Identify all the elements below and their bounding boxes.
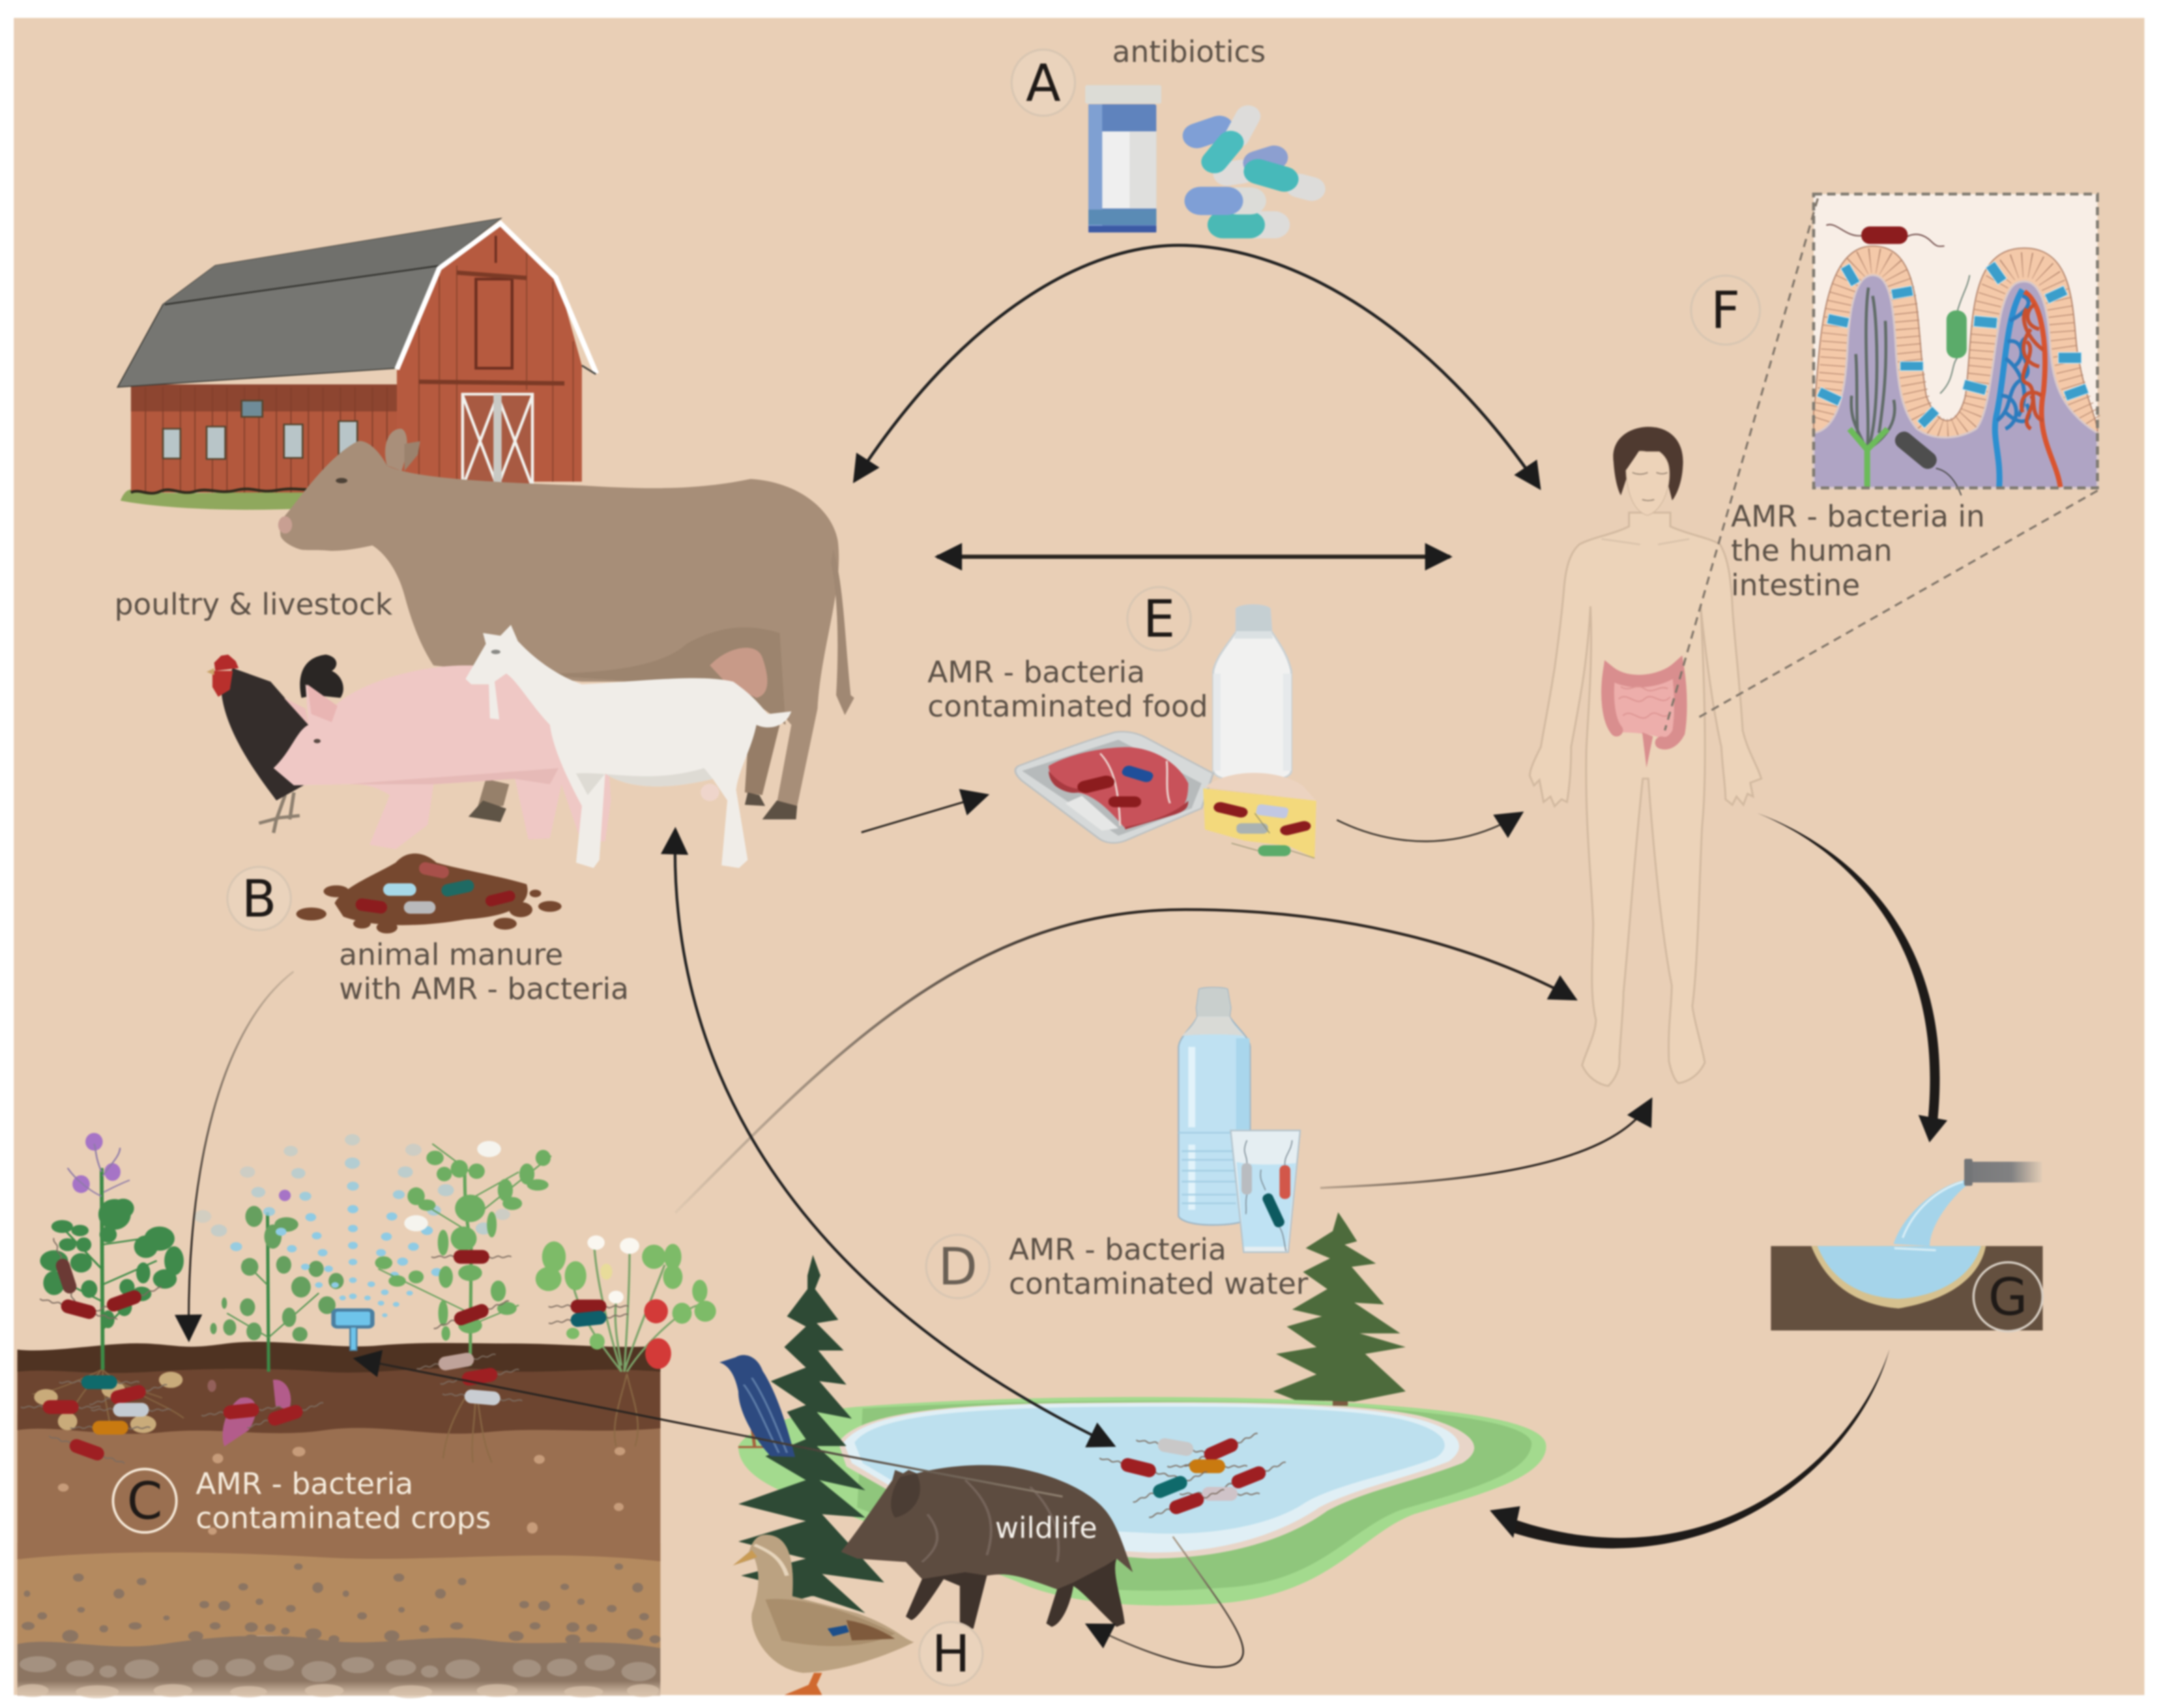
crop bacteria xyxy=(21,1236,629,1470)
head xyxy=(1602,427,1689,544)
plant 3 xyxy=(375,1141,551,1366)
water stream xyxy=(1894,1180,1967,1246)
icon: bottle of water xyxy=(1178,988,1250,1225)
text: contaminated food: contaminated food xyxy=(927,689,1208,724)
barn windows xyxy=(163,401,357,459)
label D: D xyxy=(938,1238,978,1297)
text: contaminated water: AMR - bacteria xyxy=(1009,1232,1226,1267)
inset background xyxy=(1814,194,2097,488)
pond water xyxy=(854,1406,1445,1533)
plant 2 xyxy=(210,1190,343,1372)
text: contaminated crops: AMR - bacteria xyxy=(196,1466,413,1501)
panel B: barn xyxy=(117,218,596,510)
panel C: soil layers xyxy=(16,1342,660,1698)
label F: F xyxy=(1711,281,1740,340)
inset frame xyxy=(1814,194,2097,488)
label E: E xyxy=(1143,590,1175,649)
arrow: animals to food xyxy=(862,795,987,832)
grass xyxy=(121,489,314,510)
label A: A xyxy=(1026,53,1061,113)
icon: manure pile with bacteria xyxy=(297,854,562,933)
barn door xyxy=(463,394,532,487)
label G xyxy=(1973,1262,2042,1331)
panel A: antibiotics bottle and capsules xyxy=(1085,85,1312,233)
plant 4: strawberry xyxy=(536,1236,716,1372)
roots and tubers xyxy=(33,1370,638,1462)
text: antibiotics: antibiotics xyxy=(1112,35,1266,69)
zoom guide lines xyxy=(1665,199,2098,731)
icon: cheese wedge xyxy=(1203,773,1316,858)
label G: G xyxy=(1988,1267,2028,1327)
label A xyxy=(1011,50,1075,116)
bird xyxy=(719,1355,795,1457)
icon: capsules xyxy=(1197,116,1312,225)
label E xyxy=(1127,587,1191,650)
barn gable end xyxy=(397,225,582,482)
barn side wall xyxy=(131,384,401,493)
label H xyxy=(920,1622,983,1685)
label B xyxy=(227,867,291,930)
pond bank xyxy=(738,1397,1546,1606)
text: wildlife: wildlife xyxy=(995,1512,1097,1545)
panel D: water bottle and glass xyxy=(1178,988,1300,1252)
label B: B xyxy=(242,869,276,929)
blood vessels xyxy=(1995,289,2061,487)
pond bacteria xyxy=(1098,1427,1288,1524)
text: animal manure: with AMR - bacteria xyxy=(339,972,629,1006)
panel G: wastewater pit xyxy=(1771,1159,2043,1331)
text: bacteria in the human intestine: AMR - bacteria in xyxy=(1731,499,1985,534)
goblet cells xyxy=(1817,261,2089,428)
cow xyxy=(278,429,854,822)
goat xyxy=(465,625,791,868)
panel C: crop plants xyxy=(33,1133,716,1462)
duck xyxy=(733,1535,914,1695)
tree right xyxy=(1273,1212,1406,1406)
wildlife animals and trees xyxy=(719,1212,1406,1695)
panel H: wildlife pond xyxy=(738,1397,1546,1606)
arrow: human to wastewater xyxy=(1757,813,1947,1142)
text: contaminated water: contaminated water xyxy=(1009,1267,1309,1301)
lamina propria xyxy=(1814,275,2097,488)
irrigation spray xyxy=(194,1134,510,1317)
pig xyxy=(274,665,611,849)
lacteal vessel xyxy=(1849,287,1894,487)
text: animal manure: animal manure xyxy=(339,937,563,972)
body outline xyxy=(1530,513,1762,1086)
panel B: animals xyxy=(207,429,854,868)
soil specks xyxy=(58,1447,625,1535)
intestines xyxy=(1608,668,1681,768)
arrow: manure to soil xyxy=(189,972,293,1340)
arrow: wildlife to crops xyxy=(356,1359,1063,1497)
label F xyxy=(1691,276,1760,345)
text: bacteria in the human intestine: intestine xyxy=(1731,568,1860,603)
icon: sprinkler xyxy=(334,1310,372,1350)
pit ground xyxy=(1771,1246,2043,1331)
panel F: human body xyxy=(1530,427,1762,1086)
rooster xyxy=(207,655,343,833)
icon: pill bottle xyxy=(1085,85,1161,233)
plant 1 xyxy=(40,1133,184,1370)
drain pipe xyxy=(1965,1162,2042,1183)
text: contaminated crops: contaminated crops xyxy=(196,1501,491,1535)
arrow: pond to wildlife xyxy=(1088,1537,1243,1667)
icon: milk bottle xyxy=(1213,605,1291,781)
icon: meat tray xyxy=(1015,732,1213,843)
basin water xyxy=(1811,1246,1986,1309)
arrow: animals to wildlife, two way xyxy=(675,830,1114,1445)
label C: C xyxy=(127,1471,162,1531)
label D xyxy=(926,1235,989,1298)
arrow: antibiotics to animals and humans xyxy=(854,245,1539,488)
inset bacteria xyxy=(1826,225,1969,495)
soil stones xyxy=(20,1655,656,1682)
cell dividers xyxy=(1824,261,2090,431)
text: poultry and livestock: poultry & livestock xyxy=(115,587,393,622)
arrow: wastewater to pond xyxy=(1490,1349,1889,1548)
label C xyxy=(113,1469,177,1533)
soil pebbles xyxy=(22,1563,660,1644)
text: bacteria in the human intestine: the human xyxy=(1731,534,1893,568)
panel F: intestine inset xyxy=(1814,194,2097,495)
icon: glass with bacteria xyxy=(1230,1131,1300,1252)
arrow: crops to human xyxy=(675,910,1575,1213)
epithelium xyxy=(1814,246,2097,488)
panel E: contaminated food xyxy=(1015,605,1316,858)
arrow: food to human xyxy=(1337,813,1522,841)
wild boar xyxy=(841,1465,1133,1628)
text: contaminated food: AMR - bacteria xyxy=(927,655,1145,689)
arrow: water to human xyxy=(1320,1100,1651,1188)
tree left xyxy=(738,1255,884,1614)
barn roof xyxy=(117,218,596,387)
pond shore xyxy=(838,1402,1474,1559)
arrow: animals to humans, two way xyxy=(937,556,1450,558)
label H: H xyxy=(932,1625,970,1684)
